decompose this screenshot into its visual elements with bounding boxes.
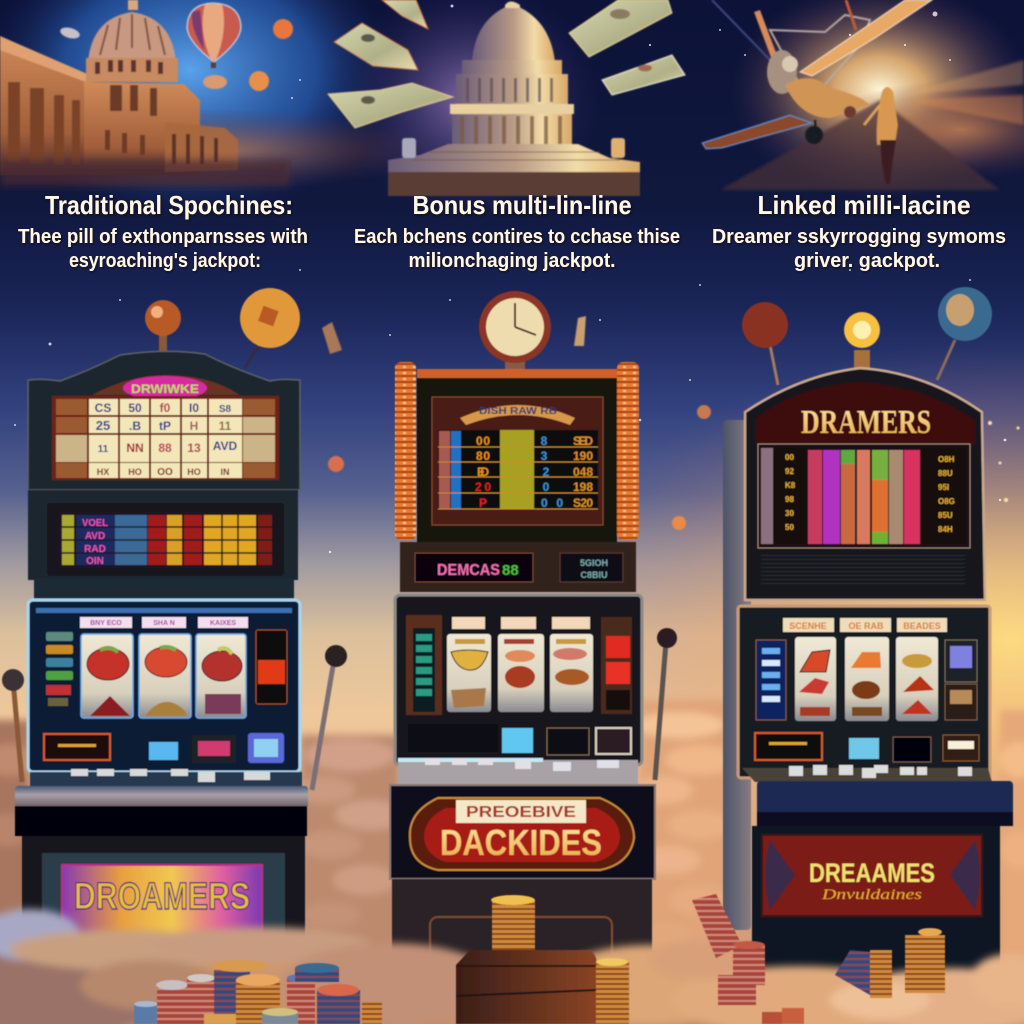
pay table screen: 88 bbox=[158, 441, 172, 455]
lower button row bbox=[755, 733, 979, 762]
text: column 2 description: Each bchens contires to cchase thise bbox=[354, 226, 680, 248]
reel labels bbox=[783, 618, 947, 632]
machine 3: linked multi-machine bbox=[723, 287, 1013, 976]
red meter bbox=[256, 630, 287, 704]
reel labels: SCENHE bbox=[789, 621, 827, 631]
pay table screen: 11 bbox=[98, 444, 109, 455]
colorful pay table: 50 bbox=[785, 523, 794, 532]
icon: flying dollar bills bbox=[328, 0, 685, 128]
heading: column 1 bbox=[18, 190, 308, 272]
colorful pay table bbox=[758, 444, 970, 548]
marquee sign: progressive jackpot bbox=[410, 798, 634, 870]
pay table screen: S20 bbox=[573, 496, 593, 510]
pink topper sign: DRWIWKE bbox=[131, 382, 199, 396]
reel labels: BNY ECO bbox=[90, 620, 122, 627]
reel cabinet bbox=[738, 606, 990, 778]
colorful pay table: O8H bbox=[938, 455, 955, 464]
colorful pay table: 95I bbox=[938, 483, 949, 492]
pay table screen: 198 bbox=[573, 480, 593, 494]
grey side panel bbox=[723, 420, 751, 930]
reel labels bbox=[452, 617, 590, 629]
pay table screen: 00 bbox=[476, 434, 490, 448]
reels with symbols bbox=[795, 637, 938, 721]
text: column 2 description: milionchaging jackpot. bbox=[408, 250, 616, 272]
right screen panel bbox=[945, 640, 977, 720]
pay table screen: IN bbox=[220, 467, 230, 477]
blue data panel bbox=[756, 640, 786, 720]
upper cabinet bbox=[28, 351, 300, 490]
pay table screen: tP bbox=[159, 419, 171, 433]
LED display panel: 5GIOH bbox=[580, 558, 608, 568]
text: column 2 description bbox=[354, 226, 680, 272]
reel labels: OE RAB bbox=[848, 621, 884, 631]
colorful pay table: 98 bbox=[785, 495, 794, 504]
LED display panel: DEMCAS bbox=[437, 562, 500, 579]
chest with coin stacks bbox=[456, 895, 629, 1024]
pay table screen: 80 bbox=[476, 449, 490, 463]
pay table screen: HO bbox=[187, 467, 201, 477]
secondary pay screen: OIN bbox=[86, 556, 104, 567]
bill: top clipped bbox=[382, 0, 428, 29]
domed cabinet bbox=[745, 368, 985, 600]
pay table screen: OO bbox=[157, 467, 173, 478]
floating orbs and particles bbox=[322, 316, 1020, 530]
pay table screen: 50 bbox=[128, 401, 142, 415]
lower base bbox=[22, 836, 305, 946]
floating orbs near balloon bbox=[59, 19, 293, 91]
LED display panel: 88 bbox=[502, 562, 519, 579]
pay table screen: 25 bbox=[96, 418, 110, 433]
red button panel bbox=[601, 617, 632, 714]
marquee sign: progressive jackpot: DACKIDES bbox=[440, 822, 602, 863]
indicator lights bbox=[46, 632, 73, 706]
pay table screen: DISH RAW RB bbox=[479, 406, 557, 417]
antenna ball and topper bbox=[145, 288, 300, 368]
top scene: left capitol building bbox=[0, 0, 290, 186]
lower base bbox=[392, 879, 652, 969]
dome sign: DRAMERS bbox=[756, 382, 975, 445]
reel labels: KAIXES bbox=[210, 620, 236, 627]
pay table screen: HO bbox=[128, 467, 142, 477]
colorful pay table: 30 bbox=[785, 509, 794, 518]
heading: column 2 bbox=[354, 190, 680, 272]
lower base bbox=[752, 826, 1000, 976]
machine 1: traditional slot machine bbox=[2, 288, 347, 946]
console slab bbox=[15, 769, 308, 836]
marquee: DROAMERS bbox=[62, 865, 262, 945]
text: column 3 description bbox=[712, 226, 1006, 272]
chip stacks: right bbox=[692, 894, 945, 1024]
mid cabinet bbox=[28, 490, 298, 580]
text: column 1 description bbox=[18, 226, 308, 272]
reel labels: BEADES bbox=[903, 621, 941, 631]
pay table screen: 11 bbox=[219, 419, 232, 433]
pay table screen: ED bbox=[477, 465, 489, 479]
pay table screen: SED bbox=[573, 434, 593, 448]
pay table screen: S8 bbox=[219, 404, 232, 415]
heading: column 3 bbox=[712, 190, 1006, 272]
coin pillars bbox=[395, 362, 639, 540]
text: column 3 description: Dreamer sskyrrogging symoms bbox=[712, 226, 1006, 248]
bill: lower right bbox=[602, 55, 685, 95]
marquee body bbox=[390, 785, 655, 879]
reel cabinet bbox=[395, 595, 642, 765]
bill: upper right bbox=[569, 0, 672, 57]
icon: girl walking toward light bbox=[864, 87, 898, 184]
mid clouds in front of machines bbox=[0, 909, 1024, 1024]
text: column 3 description: griver. gackpot. bbox=[794, 250, 940, 272]
pay table screen: 048 bbox=[573, 465, 593, 479]
LED display panel: C8BIU bbox=[580, 570, 608, 580]
colorful pay table: 92 bbox=[785, 467, 794, 476]
pay table screen bbox=[432, 397, 603, 525]
LED display panel bbox=[400, 542, 636, 592]
bill: lower left bbox=[328, 83, 453, 128]
heading: column 3: Linked milli-lacine bbox=[758, 190, 970, 220]
colorful pay table: 85U bbox=[938, 511, 953, 520]
reel cabinet bbox=[28, 600, 300, 772]
pay table screen: AVD bbox=[213, 439, 238, 453]
top scene: runway and light rays bbox=[720, 60, 1024, 190]
colorful pay table: 88U bbox=[938, 469, 953, 478]
heading: column 2: Bonus multi-lin-line bbox=[412, 190, 632, 220]
reels with symbols bbox=[447, 634, 593, 712]
pay table screen: CS bbox=[95, 401, 111, 415]
lever bbox=[655, 628, 677, 780]
lower button row bbox=[44, 733, 284, 763]
pay table screen: P bbox=[479, 496, 487, 510]
colorful pay table: 84H bbox=[938, 525, 953, 534]
lower button row bbox=[408, 724, 631, 755]
pay table screen: NN bbox=[126, 441, 144, 455]
secondary pay screen bbox=[58, 512, 273, 568]
pay table screen: 13 bbox=[187, 441, 201, 455]
pay table screen: 190 bbox=[573, 449, 593, 463]
pay table screen: 00 bbox=[541, 496, 563, 510]
reels with tomatoes bbox=[81, 634, 246, 718]
pay table screen: 0 bbox=[543, 480, 550, 494]
pay table screen: 3 bbox=[541, 449, 548, 463]
secondary pay screen: VOEL bbox=[82, 518, 108, 529]
pay table screen: 20 bbox=[475, 480, 491, 494]
colorful pay table: 00 bbox=[785, 453, 794, 462]
dome sign: DRAMERS: DRAMERS bbox=[801, 404, 931, 441]
icon: hot air balloon bbox=[187, 3, 241, 68]
icon: propeller plane bbox=[702, 0, 932, 149]
secondary pay screen: AVD bbox=[85, 531, 105, 542]
left data panel bbox=[406, 615, 442, 715]
console bbox=[742, 765, 1013, 826]
text: column 1 description: Thee pill of exthonparnsses with bbox=[18, 226, 308, 248]
chip pile: left bbox=[134, 960, 382, 1024]
marquee sign: progressive jackpot: PREOEBIVE bbox=[466, 804, 576, 821]
bill: upper left bbox=[334, 23, 418, 70]
text: column 1 description: esyroaching's jackpot: bbox=[69, 250, 261, 272]
pay table screen: .B bbox=[129, 419, 141, 433]
marquee: DREAAMES bbox=[762, 835, 982, 916]
marquee: DROAMERS: DROAMERS bbox=[74, 876, 250, 918]
top scene: center capitol dome bbox=[388, 2, 640, 196]
heading: column 1: Traditional Spochines: bbox=[45, 190, 293, 220]
colorful pay table: K8 bbox=[785, 481, 796, 490]
pay table screen: 8 bbox=[541, 434, 548, 448]
pay table screen bbox=[52, 396, 279, 480]
pay table screen: 2 bbox=[543, 465, 550, 479]
pay table screen: f0 bbox=[160, 401, 171, 415]
marquee: DREAAMES: Dnvuldaines bbox=[821, 887, 922, 903]
reel labels bbox=[80, 617, 248, 628]
pay table screen: HX bbox=[97, 467, 109, 477]
speaker grill bbox=[761, 554, 965, 586]
header body bbox=[417, 372, 617, 542]
pink topper sign bbox=[92, 375, 240, 400]
levers bbox=[2, 645, 347, 790]
secondary pay screen: RAD bbox=[84, 544, 106, 555]
machine 2: bonus multi-line bbox=[390, 291, 677, 969]
back clouds behind machines bbox=[0, 700, 1024, 1000]
colorful pay table: O8G bbox=[938, 497, 955, 506]
antenna balls bbox=[742, 287, 992, 385]
console bbox=[398, 758, 638, 786]
clock bbox=[479, 291, 551, 372]
marquee: DREAAMES: DREAAMES bbox=[809, 858, 935, 888]
reel labels: SHA N bbox=[153, 620, 175, 627]
pay table screen: I0 bbox=[189, 401, 199, 415]
pay table screen: H bbox=[190, 419, 198, 433]
